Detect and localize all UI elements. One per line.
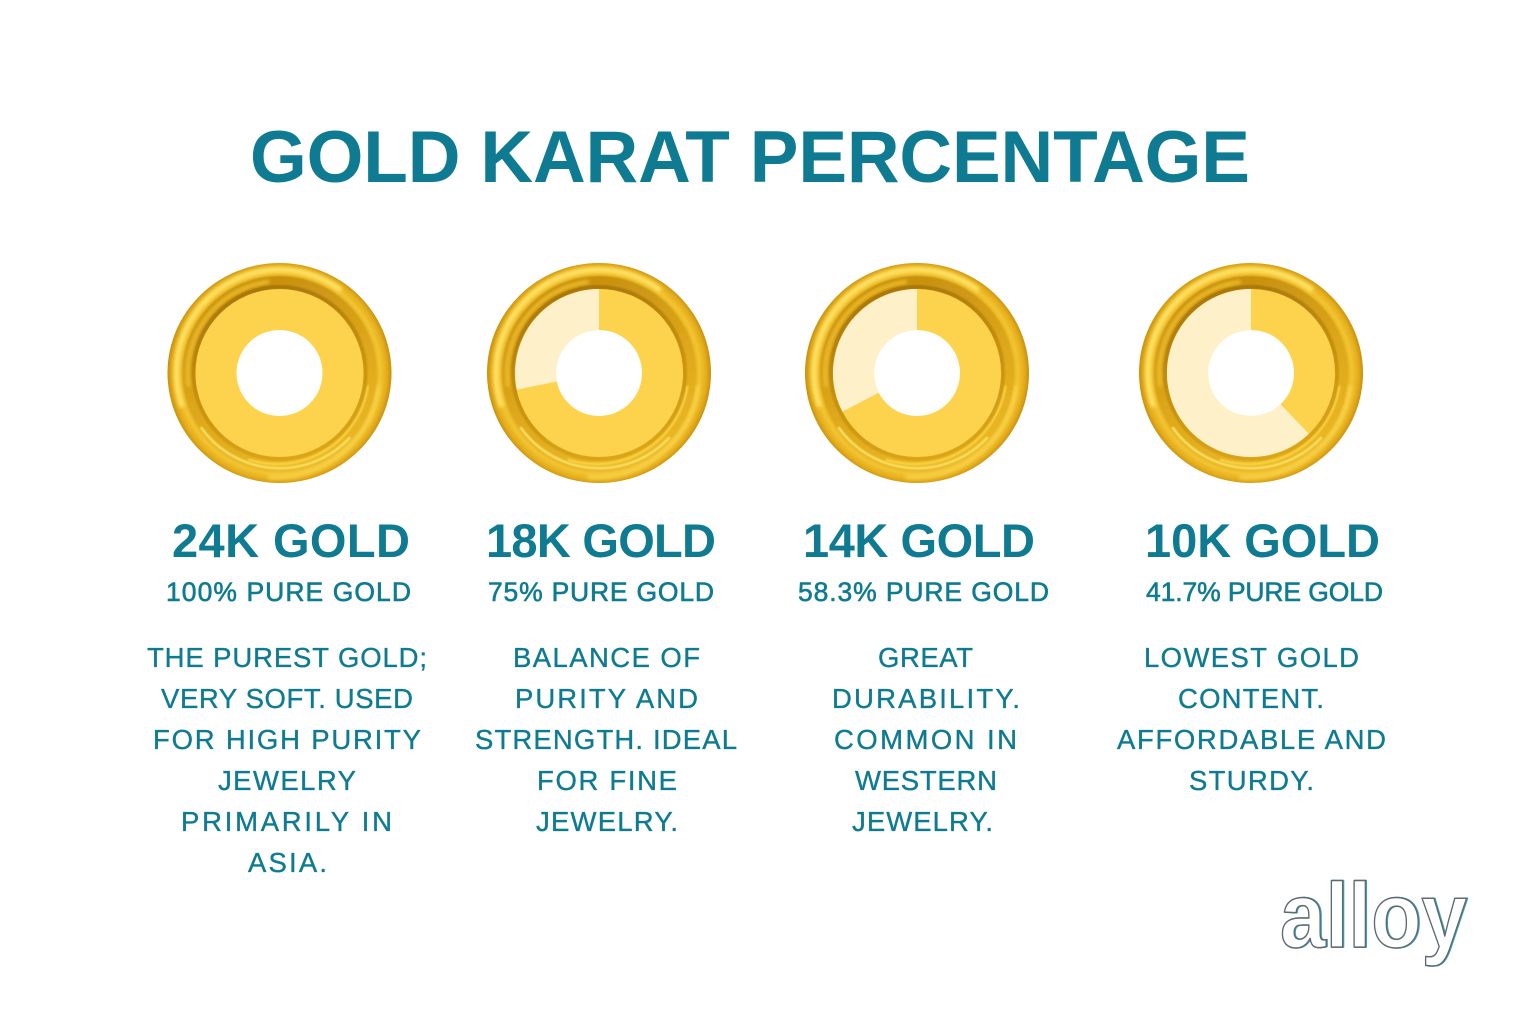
heading: 18K: 18K GOLD (486, 514, 716, 567)
panel: 14K gold (798, 263, 1049, 837)
title: GOLD KARAT PERCENTAGE (250, 117, 1250, 198)
subheading: 14K purity: 58.3% PURE GOLD (798, 577, 1049, 607)
text block: 18K description: BALANCE OF (513, 642, 700, 673)
text block: 14K description: WESTERN (855, 765, 997, 796)
icon: 24K ring donut 100 percent (168, 263, 392, 483)
heading: 10K: 10K GOLD (1145, 514, 1380, 567)
text block: 10K description: AFFORDABLE AND (1117, 724, 1386, 755)
panel: 10K gold (1117, 263, 1386, 796)
text block: 18K description: STRENGTH. IDEAL (475, 724, 737, 755)
subheading: 24K purity: 100% PURE GOLD (166, 577, 411, 607)
icon: 10K ring donut 41.7 percent (1139, 263, 1363, 483)
text block: 24K description: FOR HIGH PURITY (153, 724, 421, 755)
text block: 18K description: PURITY AND (515, 683, 698, 714)
text block: 14K description: JEWELRY. (852, 806, 993, 837)
text block: 24K description: ASIA. (248, 847, 327, 878)
text block: 18K description (475, 642, 737, 837)
icon: 18K ring donut 75 percent (487, 263, 711, 483)
panel: 18K gold (475, 263, 737, 837)
text block: 14K description: GREAT (878, 642, 973, 673)
panel: 24K gold (147, 263, 427, 878)
heading: 14K: 14K GOLD (803, 514, 1035, 567)
text block: 24K description: PRIMARILY IN (181, 806, 392, 837)
text block: 14K description: COMMON IN (834, 724, 1017, 755)
logo: alloy: alloy (1280, 865, 1467, 967)
text block: 18K description: JEWELRY. (536, 806, 678, 837)
text block: 10K description: LOWEST GOLD (1144, 642, 1359, 673)
text block: 24K description: VERY SOFT. USED (161, 683, 413, 714)
text block: 14K description: DURABILITY. (832, 683, 1020, 714)
text block: 24K description (147, 642, 427, 878)
text block: 24K description: JEWELRY (218, 765, 356, 796)
subheading: 10K purity: 41.7% PURE GOLD (1146, 577, 1383, 607)
text block: 10K description: STURDY. (1189, 765, 1314, 796)
text block: 10K description: CONTENT. (1178, 683, 1324, 714)
subheading: 18K purity: 75% PURE GOLD (488, 577, 714, 607)
text block: 10K description (1117, 642, 1386, 796)
text block: 14K description (832, 642, 1020, 837)
text block: 24K description: THE PUREST GOLD; (147, 642, 427, 673)
text block: 18K description: FOR FINE (537, 765, 677, 796)
icon: 14K ring donut 58.3 percent (805, 263, 1029, 483)
heading: 24K: 24K GOLD (172, 514, 410, 567)
